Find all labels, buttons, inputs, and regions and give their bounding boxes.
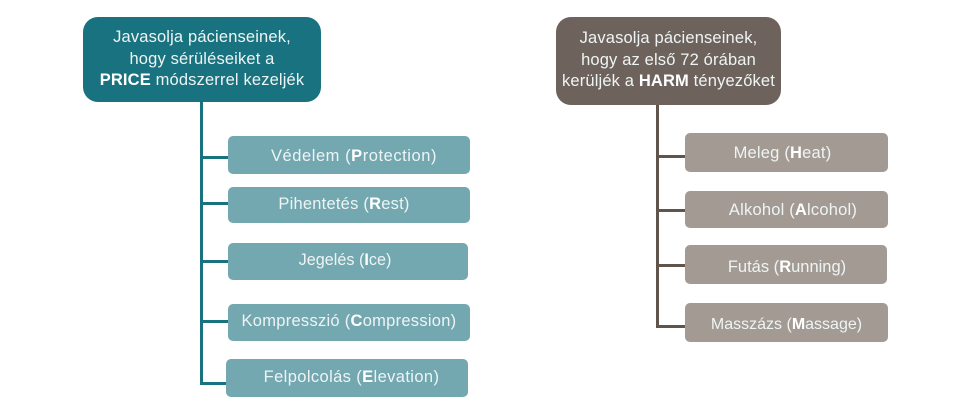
item: Rest: Pihentetés (Rest) [278, 195, 410, 213]
connector: PRICE tree [200, 102, 228, 385]
heading: HARM recommendation: kerüljék a HARM tényezőket [562, 72, 775, 90]
connector: HARM tree [656, 105, 685, 328]
item: Protection [228, 136, 470, 174]
item: Alcohol [685, 191, 888, 228]
heading: PRICE recommendation: hogy sérüléseiket a [129, 50, 275, 68]
item: Massage: Masszázs (Massage) [711, 316, 862, 333]
item: Heat [685, 133, 888, 172]
heading: HARM recommendation: Javasolja pácienseinek, [580, 29, 757, 47]
item: Massage [685, 303, 888, 342]
item: Running: Futás (Running) [728, 258, 846, 276]
item: Rest [228, 187, 470, 223]
item: Compression [228, 304, 470, 341]
item: Heat: Meleg (Heat) [734, 144, 831, 162]
item: Elevation [226, 359, 468, 397]
item: Ice: Jegelés (Ice) [299, 251, 391, 269]
heading: PRICE recommendation [83, 17, 321, 102]
item: Ice [228, 243, 468, 280]
item: Alcohol: Alkohol (Alcohol) [729, 201, 857, 219]
heading: HARM recommendation: hogy az első 72 órában [581, 50, 756, 68]
item: Running [685, 245, 887, 284]
item: Compression: Kompresszió (Compression) [242, 312, 456, 330]
heading: PRICE recommendation: PRICE módszerrel kezeljék [100, 71, 304, 89]
item: Protection: Védelem (Protection) [271, 147, 437, 165]
item: Elevation: Felpolcolás (Elevation) [264, 368, 439, 386]
heading: PRICE recommendation: Javasolja pácienseinek, [113, 28, 291, 46]
heading: HARM recommendation [556, 17, 781, 105]
